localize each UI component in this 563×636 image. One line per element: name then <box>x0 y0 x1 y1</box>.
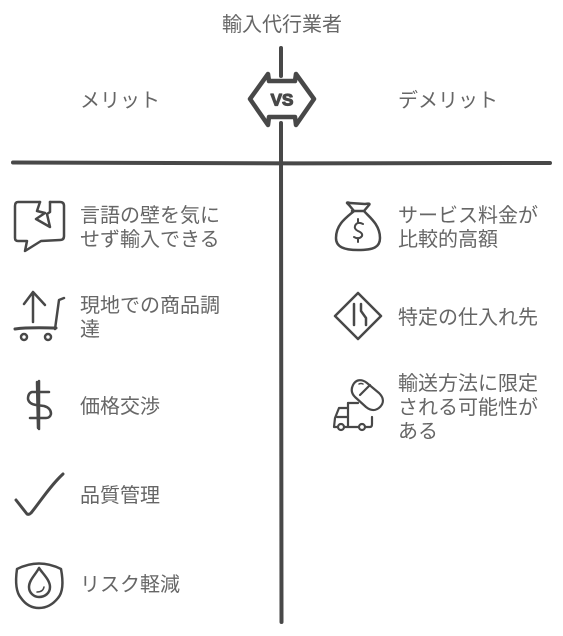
text: language barrier: せず輸入できる <box>80 229 220 251</box>
icon: road narrowing sign <box>335 293 381 339</box>
text: language barrier: 言語の壁を気に <box>80 205 220 227</box>
icon: check mark <box>16 474 63 514</box>
icon: truck with capsule <box>334 380 383 430</box>
text: limited transport: される可能性が <box>398 397 538 419</box>
icon: vs badge <box>250 74 314 125</box>
heading: merits: メリット <box>80 90 160 112</box>
icon: shield with drop <box>16 564 62 608</box>
text: limited transport: ある <box>398 421 438 443</box>
title: 輸入代行業者 <box>222 14 342 36</box>
text: risk reduction: リスク軽減 <box>80 574 180 596</box>
text: local procurement: 達 <box>80 319 100 341</box>
text: service fee <box>398 205 538 251</box>
icon: dollar sign <box>28 381 51 429</box>
text: limited transport: 輸送方法に限定 <box>398 373 538 395</box>
icon: money bag <box>336 202 380 250</box>
horizontal divider <box>13 160 550 165</box>
vertical divider <box>279 48 284 622</box>
icon: vs badge: VS <box>271 90 293 110</box>
text: service fee: サービス料金が <box>398 205 538 227</box>
text: quality control: 品質管理 <box>80 485 160 507</box>
text: price negotiation: 価格交渉 <box>80 396 160 418</box>
text: local procurement: 現地での商品調 <box>80 295 220 317</box>
text: local procurement <box>80 295 220 341</box>
text: limited suppliers: 特定の仕入れ先 <box>398 307 538 329</box>
text: limited transport <box>398 373 538 443</box>
text: service fee: 比較的高額 <box>398 229 498 251</box>
icon: broken speech bubble <box>15 202 64 251</box>
text: language barrier <box>80 205 220 251</box>
icon: cart with arrow <box>15 292 64 340</box>
heading: demerits: デメリット <box>398 90 498 112</box>
